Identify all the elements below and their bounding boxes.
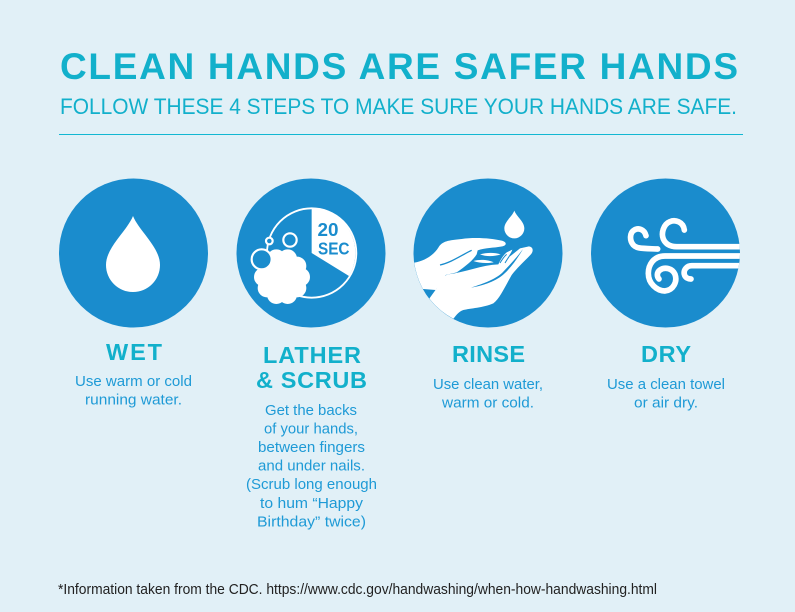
step 2 text: lather and scrub: (Scrub long enough — [246, 476, 377, 493]
step 1 text: wet — [75, 339, 192, 408]
icon: hands rinsing under droplet — [405, 178, 562, 332]
icon: water drop — [59, 178, 208, 328]
step 2 text: lather and scrub: of your hands, — [264, 420, 358, 438]
step 4 text: dry: or air dry. — [634, 394, 698, 412]
icon: soap and 20 second timer: 20 — [318, 220, 338, 240]
icon: wind — [591, 178, 745, 328]
subtitle: FOLLOW THESE 4 STEPS TO MAKE SURE YOUR HANDS ARE SAFE. — [60, 94, 737, 119]
step 3 text: rinse: Use clean water, — [433, 376, 543, 393]
step 2 text: lather and scrub: & SCRUB — [256, 367, 367, 393]
step 2 text: lather and scrub: Get the backs — [265, 402, 357, 419]
step 3 text: rinse: RINSE — [452, 341, 525, 367]
step 2 text: lather and scrub: to hum “Happy — [260, 495, 364, 512]
step 3 text: rinse — [433, 341, 543, 412]
step 1 text: wet: running water. — [85, 392, 182, 408]
step 4 text: dry: DRY — [641, 341, 691, 367]
step 4 text: dry — [607, 341, 725, 412]
step 4 text: dry: Use a clean towel — [607, 376, 725, 393]
title: CLEAN HANDS ARE SAFER HANDS — [60, 46, 738, 87]
step 2 text: lather and scrub: LATHER — [263, 342, 361, 368]
step 1 text: wet: WET — [106, 339, 163, 365]
step 2 text: lather and scrub — [246, 342, 377, 530]
step 3 text: rinse: warm or cold. — [441, 394, 534, 412]
step 2 text: lather and scrub: and under nails. — [258, 458, 365, 474]
icon: soap and 20 second timer: SEC — [318, 238, 350, 258]
icon: soap and 20 second timer — [236, 178, 386, 328]
footnote: *Information taken from the CDC. https://www.cdc.gov/handwashing/when-how-handwashing.html — [58, 582, 657, 598]
step 2 text: lather and scrub: between fingers — [258, 439, 365, 456]
step 1 text: wet: Use warm or cold — [75, 373, 192, 390]
step 2 text: lather and scrub: Birthday” twice) — [257, 514, 366, 530]
